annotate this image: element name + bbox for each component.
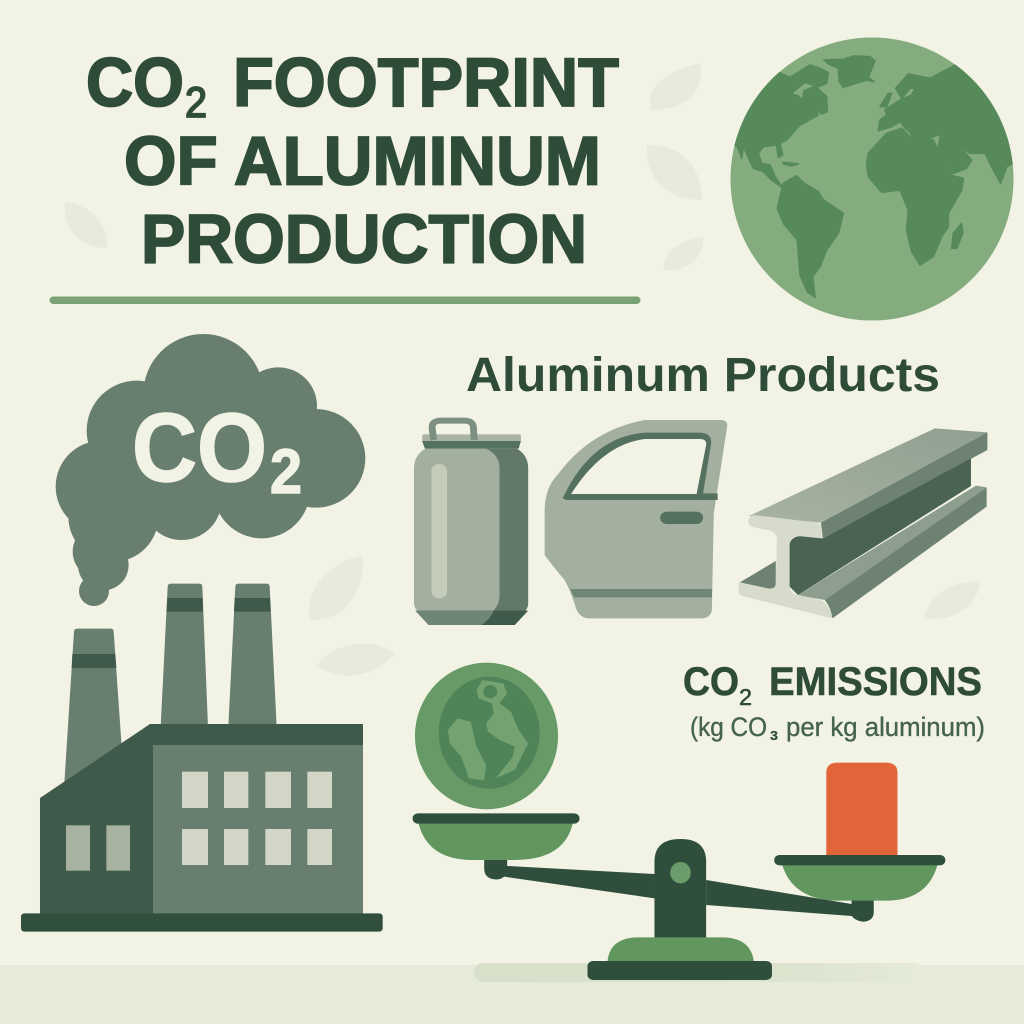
subheading: units: 3 [770,728,778,743]
icon: balance scale [413,663,945,980]
right pan [774,855,945,901]
cloud label: CO [132,393,267,502]
orange emissions block [826,763,897,857]
subheading: units: (kg CO [690,712,767,742]
title: OF ALUMINUM [124,122,601,200]
beam [484,858,874,922]
post and pivot [654,839,706,940]
icon: CO2 cloud with smoke [56,334,365,606]
heading: CO2 emissions: 2 [739,684,752,710]
factory windows [182,772,332,865]
icon: aluminum can [414,421,528,625]
title: 2 [185,79,207,127]
title [86,44,619,278]
icon: factory [21,584,383,932]
cloud label: 2 [270,437,302,507]
subheading: units [690,712,985,743]
icon: I-beam [739,428,987,618]
earth coin on left pan [415,663,558,809]
icon: globe [727,38,1024,320]
heading: CO2 emissions: EMISSIONS [769,660,982,704]
heading: CO2 emissions [683,660,982,710]
heading: aluminum products: Aluminum Products [466,349,940,402]
chimneys [64,584,277,783]
decorative leaves [65,63,981,676]
scale base [588,937,772,980]
ground band [0,963,1024,1024]
heading: CO2 emissions: CO [683,660,739,704]
factory base [21,913,383,932]
title underline [50,296,640,304]
title: CO [86,44,184,121]
title: FOOTPRINT [233,44,619,121]
title: PRODUCTION [141,200,587,278]
subheading: units: per kg aluminum) [786,712,985,742]
left pan [413,813,579,860]
icon: car door [545,420,727,618]
factory building [40,724,363,915]
